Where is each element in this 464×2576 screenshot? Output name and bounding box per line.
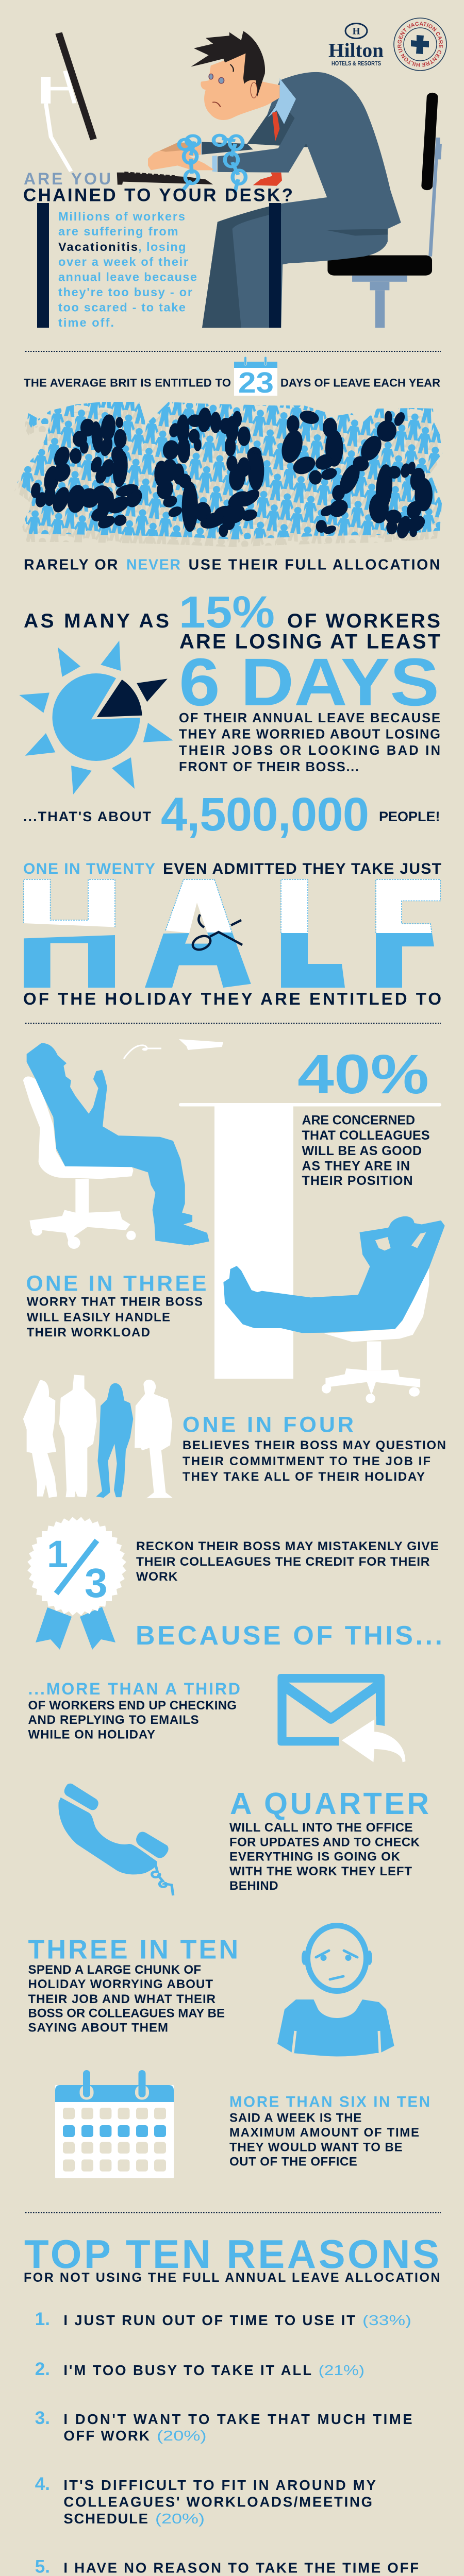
text: are concerned: THAT COLLEAGUES <box>302 1128 430 1143</box>
entitlement line with calendar <box>24 357 440 399</box>
icon: scissors <box>191 914 242 952</box>
stat: three in ten: SPEND A LARGE CHUNK OF <box>28 1963 201 1977</box>
icon: one-third rosette <box>27 1517 126 1650</box>
icon: email with reply arrow <box>277 1674 405 1762</box>
stat: one in three <box>26 1272 206 1340</box>
stat: one in four: ONE IN FOUR <box>183 1413 354 1437</box>
icon: one-third rosette: 3 <box>85 1560 107 1606</box>
reason 4 <box>35 2474 376 2527</box>
heading: one in twenty <box>23 860 441 877</box>
stat: a quarter: A QUARTER <box>230 1787 429 1821</box>
reason 4: COLLEAGUES' WORKLOADS/MEETING <box>63 2494 372 2510</box>
reason 2 <box>35 2359 364 2379</box>
intro text block: too scared - to take <box>58 300 186 314</box>
stat: 15% of workers: OF THEIR ANNUAL LEAVE BECAUSE <box>179 711 440 725</box>
navy people: right of 0 and percent sign <box>221 410 432 538</box>
heading: one in twenty: ONE IN TWENTY <box>23 860 155 877</box>
intro text block <box>58 210 197 329</box>
chains <box>179 135 245 193</box>
stat: more than six in ten: SAID A WEEK IS THE <box>229 2111 361 2125</box>
reason 2: 2. <box>35 2359 50 2379</box>
reason 1 <box>35 2309 411 2329</box>
stat: three in ten: THEIR JOB AND WHAT THEIR <box>28 1992 216 2006</box>
stat: one in four: THEIR COMMITMENT TO THE JOB IF <box>183 1454 430 1468</box>
heading: top ten reasons: TOP TEN REASONS <box>24 2231 439 2277</box>
stat: 15% of workers: FRONT OF THEIR BOSS... <box>179 760 359 774</box>
stat: one in three: ONE IN THREE <box>26 1272 206 1296</box>
stat: more than six in ten: THEY WOULD WANT TO BE <box>229 2140 403 2154</box>
title: ARE YOU <box>24 170 111 188</box>
logo: Hilton: Hilton <box>328 40 384 62</box>
desk legs <box>37 203 281 328</box>
stat: 15% of workers: ARE LOSING AT LEAST <box>179 631 440 653</box>
stat: 15% of workers: 15% <box>179 587 275 637</box>
icon: paper plane <box>124 1039 223 1059</box>
reason 4: 4. <box>35 2474 50 2494</box>
text: are concerned: WILL BE AS GOOD <box>302 1144 422 1158</box>
stat: more than a third: ...MORE THAN A THIRD <box>28 1680 240 1698</box>
list: top ten reasons <box>25 2309 440 2576</box>
stat: 4,500,000 people: PEOPLE! <box>379 809 440 824</box>
stat: one in four <box>183 1413 446 1484</box>
reason 2: I'M TOO BUSY TO TAKE IT ALL <box>63 2362 311 2378</box>
stat: three in ten: SAYING ABOUT THEM <box>28 2021 168 2035</box>
chair <box>23 1076 136 1249</box>
stat: 15% of workers: 6 DAYS <box>179 644 439 720</box>
white table <box>179 1103 441 1379</box>
stat: 40% colleagues: 40% <box>297 1043 429 1105</box>
stat: 4,500,000 people: ...THAT'S ABOUT <box>23 809 152 824</box>
stat: one in three: WILL EASILY HANDLE <box>27 1310 170 1324</box>
stat: 15% of workers: OF WORKERS <box>287 610 440 632</box>
intro text block: over a week of their <box>58 255 188 268</box>
text: reckon <box>136 1539 439 1584</box>
illustration: man chained to desk <box>41 31 442 328</box>
reason 1: 1. <box>35 2309 50 2329</box>
heading: because of this: BECAUSE OF THIS... <box>136 1621 442 1651</box>
icon: one-third rosette: 1 <box>47 1533 68 1575</box>
stat: more than six in ten: MORE THAN SIX IN TEN <box>229 2094 430 2111</box>
stat: a quarter <box>229 1787 429 1893</box>
stat: 15% of workers: THEIR JOBS OR LOOKING BAD IN <box>179 743 440 758</box>
stat: a quarter: WILL CALL INTO THE OFFICE <box>229 1821 413 1835</box>
office chair <box>327 97 442 328</box>
reason 1: (33%) <box>362 2312 411 2328</box>
icon: calendar 23: 23 <box>238 366 274 399</box>
title <box>23 170 293 206</box>
caption: rarely or never: NEVER <box>126 557 180 573</box>
reason 5: I HAVE NO REASON TO TAKE THE TIME OFF <box>63 2560 419 2576</box>
icon: sun pie chart <box>19 640 173 794</box>
text: are concerned: ARE CONCERNED <box>302 1113 415 1128</box>
stat: more than a third: OF WORKERS END UP CHECKING <box>28 1699 237 1713</box>
stat: three in ten: BOSS OR COLLEAGUES MAY BE <box>28 2007 225 2021</box>
chair <box>322 1268 429 1403</box>
icon: wall calendar <box>55 2070 174 2178</box>
caption: rarely or never <box>24 557 440 573</box>
reason 4: IT'S DIFFICULT TO FIT IN AROUND MY <box>63 2477 376 2493</box>
monitor and stand <box>41 32 97 172</box>
keyboard <box>117 173 213 184</box>
reason 3: OFF WORK <box>63 2428 150 2444</box>
stamp: Hilton Urgent Vacation Care Centre: HILTON URGENT VACATION CARE CENTRE <box>397 22 443 67</box>
stat: one in four: THEY TAKE ALL OF THEIR HOLIDAY <box>183 1470 425 1484</box>
caption: rarely or never: RARELY OR <box>24 557 118 573</box>
stat: more than six in ten: MAXIMUM AMOUNT OF TIME <box>229 2126 419 2140</box>
reason 4: SCHEDULE <box>63 2511 148 2527</box>
crowd of people forming 40% <box>14 402 442 547</box>
text: reckon: THEIR COLLEAGUES THE CREDIT FOR THEIR <box>136 1555 430 1569</box>
logo: Hilton: HOTELS & RESORTS <box>332 61 381 67</box>
stat: a quarter: FOR UPDATES AND TO CHECK <box>229 1836 420 1850</box>
entitlement line with calendar: THE AVERAGE BRIT IS ENTITLED TO <box>24 376 231 389</box>
stat: three in ten: HOLIDAY WORRYING ABOUT <box>28 1977 213 1991</box>
silhouette: seated person on chair <box>23 1043 209 1249</box>
stat: 15% of workers <box>24 587 440 774</box>
icon: telephone handset <box>58 1784 173 1895</box>
entitlement line with calendar: DAYS OF LEAVE EACH YEAR <box>280 376 440 389</box>
stat: more than six in ten <box>229 2094 430 2169</box>
silhouette: reclining person on chair <box>223 1216 445 1403</box>
caption: rarely or never: USE THEIR FULL ALLOCATION <box>189 557 440 573</box>
text: are concerned: THEIR POSITION <box>302 1174 412 1188</box>
stat: 15% of workers: THEY ARE WORRIED ABOUT LOSING <box>179 727 440 742</box>
stat: more than six in ten: OUT OF THE OFFICE <box>229 2155 357 2169</box>
stat: more than a third <box>28 1680 240 1741</box>
stat: a quarter: EVERYTHING IS GOING OK <box>229 1850 401 1864</box>
stat: one in three: THEIR WORKLOAD <box>27 1326 150 1340</box>
man in suit <box>148 31 401 328</box>
intro text block: , losing <box>138 240 186 253</box>
stat: one in three: WORRY THAT THEIR BOSS <box>27 1295 203 1309</box>
stat: more than a third: AND REPLYING TO EMAILS <box>28 1713 199 1727</box>
text: reckon: WORK <box>136 1570 178 1584</box>
intro text block: are suffering from <box>58 225 178 238</box>
intro text block: Vacationitis <box>58 240 138 253</box>
silhouettes: four colleagues <box>23 1375 173 1498</box>
reason 1: I JUST RUN OUT OF TIME TO USE IT <box>63 2312 355 2328</box>
intro text block: time off. <box>58 316 114 329</box>
reason 4: (20%) <box>155 2511 205 2527</box>
icon: calendar 23 <box>234 357 277 399</box>
stat: more than a third: WHILE ON HOLIDAY <box>28 1728 155 1741</box>
reason 3 <box>35 2408 412 2444</box>
navy people: digit 4 and left of 0 <box>31 408 234 536</box>
text: are concerned <box>302 1113 430 1188</box>
caption: of the holiday: OF THE HOLIDAY THEY ARE ENTITLED TO <box>23 989 441 1008</box>
reason 3: 3. <box>35 2408 50 2428</box>
stat: a quarter: WITH THE WORK THEY LEFT <box>229 1865 412 1878</box>
word HALF cut in two <box>24 879 440 988</box>
stat: one in four: BELIEVES THEIR BOSS MAY QUESTION <box>183 1438 446 1452</box>
intro text block: they're too busy - or <box>58 285 192 299</box>
logo: Hilton: H <box>353 26 360 37</box>
text: are concerned: AS THEY ARE IN <box>302 1159 410 1173</box>
reason 3: (20%) <box>157 2428 207 2444</box>
intro text block: Millions of workers <box>58 210 185 223</box>
reason 2: (21%) <box>319 2362 364 2378</box>
stat: three in ten <box>28 1935 238 2035</box>
text: reckon: RECKON THEIR BOSS MAY MISTAKENLY GIVE <box>136 1539 439 1553</box>
stat: 15% of workers: AS MANY AS <box>24 610 169 632</box>
heading: one in twenty: EVEN ADMITTED THEY TAKE JUST <box>163 860 441 877</box>
stat: 4,500,000 people <box>23 788 440 841</box>
intro text block: annual leave because <box>58 270 197 283</box>
title: CHAINED TO YOUR DESK? <box>23 185 293 206</box>
reason 3: I DON'T WANT TO TAKE THAT MUCH TIME <box>63 2411 412 2427</box>
stat: 4,500,000 people: 4,500,000 <box>161 788 369 841</box>
logo: Hilton <box>328 24 384 67</box>
heading: top ten reasons: FOR NOT USING THE FULL ANNUAL LEAVE ALLOCATION <box>24 2270 440 2285</box>
icon: worried man <box>277 1926 394 2057</box>
stat: a quarter: BEHIND <box>229 1879 278 1893</box>
stat: three in ten: THREE IN TEN <box>28 1935 238 1965</box>
